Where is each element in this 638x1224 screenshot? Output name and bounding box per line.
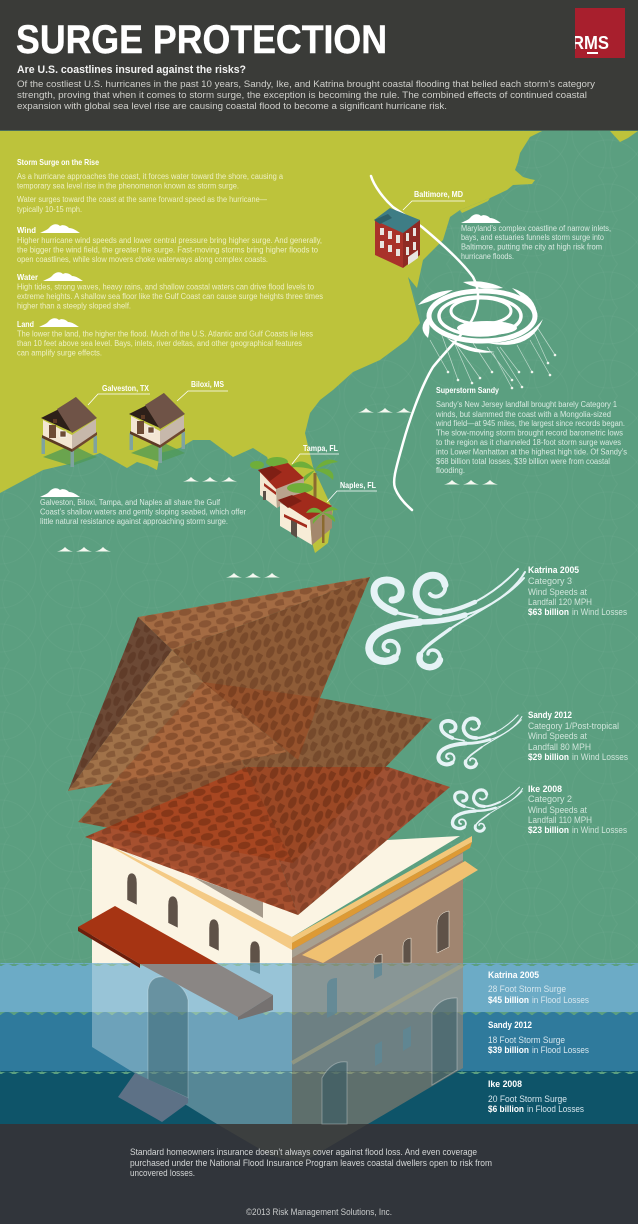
icon: wind Sandy: [438, 715, 522, 768]
icon: Florida palms and buildings: [250, 457, 338, 545]
text: Sandy wind: in Wind Losses: [572, 752, 628, 762]
text: gulf coast note: [40, 488, 246, 526]
text: Sandy wind: Wind Speeds at: [528, 731, 587, 741]
RMS logo: [572, 8, 625, 58]
footer note: purchased under the National Flood Insurance Program leaves coastal dwellers open to risk from: [130, 1158, 492, 1169]
text: Sandy flood: in Flood Losses: [532, 1045, 589, 1055]
panel: storm surge explainer: High tides, strong waves, heavy rains, and shallow coastal waters can drive flood levels to: [17, 282, 315, 292]
panel: storm surge explainer: the bigger the wind field, the greater the surge. Fast-moving storms bring higher floods to: [17, 246, 319, 254]
text: Katrina flood: in Flood Losses: [532, 995, 589, 1005]
text: Ike wind: $23 billion: [528, 825, 569, 835]
chart: water bands: [0, 963, 638, 1124]
text: Katrina flood: Katrina 2005: [488, 970, 539, 980]
panel: storm surge explainer: temporary sea level rise in the phenomenon known as storm surge.: [17, 182, 239, 190]
label: Naples: [327, 480, 377, 502]
illustration: house walls: [92, 835, 478, 963]
label: Biloxi: Biloxi, MS: [191, 379, 224, 389]
text: Ike flood: in Flood Losses: [527, 1104, 584, 1114]
text: Ike wind: Landfall 110 MPH: [528, 815, 592, 825]
icon: small waves: [57, 408, 498, 578]
footer note: [130, 1147, 492, 1179]
text: Sandy wind: $29 billion: [528, 752, 569, 762]
RMS logo: RMS: [572, 33, 609, 53]
text: Katrina flood: [488, 970, 589, 1005]
text: Superstorm Sandy: to the region as it channeled 18-foot storm surge waves: [436, 438, 621, 447]
label: Baltimore: Baltimore, MD: [414, 189, 463, 199]
label: Biloxi: [177, 379, 228, 401]
text: Katrina wind: Landfall 120 MPH: [528, 597, 592, 607]
door: right: [432, 998, 457, 1085]
panel: storm surge explainer: Water: [17, 272, 39, 282]
label: Galveston: [88, 383, 150, 405]
text: Superstorm Sandy: Superstorm Sandy: [436, 385, 499, 395]
intro paragraph: expansion with global sea level rise are causing coastal flood to become a significant hurricane risk.: [17, 101, 447, 112]
icon: house Biloxi: [129, 393, 185, 463]
text: Ike flood: [488, 1079, 584, 1114]
text: Ike flood: 20 Foot Storm Surge: [488, 1094, 567, 1104]
text: Superstorm Sandy: The slow-moving storm brought record barometric lows: [436, 428, 623, 438]
illustration: ghost house under water: [92, 963, 463, 1164]
panel: storm surge explainer: open coastlines, while slow movers choke waterways along complex coasts.: [17, 255, 268, 264]
icon: wind Katrina: [369, 569, 525, 667]
text: Ike wind: [528, 784, 627, 835]
illustration: roof layer 3: [85, 767, 450, 915]
icon: wind Ike: [452, 787, 523, 831]
panel: storm surge explainer: [17, 157, 323, 358]
text: Katrina wind: [528, 565, 627, 617]
text: gulf coast note: little natural resistance against approaching storm surge.: [40, 517, 228, 526]
panel: storm surge explainer: Water surges toward the coast at the same forward speed as the hurricane—: [17, 195, 267, 204]
panel: storm surge explainer: can amplify surge effects.: [17, 348, 102, 358]
text: Maryland note: Baltimore, putting the city at high risk from: [461, 242, 602, 252]
text: Ike wind: in Wind Losses: [572, 825, 627, 835]
text: Katrina wind: in Wind Losses: [572, 607, 627, 617]
illustration: awning: [78, 906, 273, 1020]
label: Tampa: [292, 443, 339, 464]
text: Katrina wind: Katrina 2005: [528, 565, 579, 575]
building Tampa: [258, 463, 304, 508]
text: Superstorm Sandy: Sandy’s New Jersey landfall brought barely Category 1: [436, 400, 618, 409]
text: Superstorm Sandy: $68 billion total losses, $39 billion were from coastal: [436, 457, 610, 466]
copyright: ©2013 Risk Management Solutions, Inc.: [246, 1207, 392, 1217]
text: Katrina wind: Wind Speeds at: [528, 587, 587, 597]
panel: storm surge explainer: than 10 feet above sea level. Bays, inlets, river deltas, and other geographical features: [17, 339, 302, 348]
door: left: [148, 977, 188, 1098]
text: Maryland note: Maryland’s complex coastline of narrow inlets,: [461, 224, 611, 233]
panel: storm surge explainer: typically 10-15 mph.: [17, 205, 82, 214]
text: Sandy flood: 18 Foot Storm Surge: [488, 1035, 565, 1045]
footer note: Standard homeowners insurance doesn’t always cover against flood loss. And even coverage: [130, 1147, 477, 1158]
text: gulf coast note: Galveston, Biloxi, Tampa, and Naples all share the Gulf: [40, 498, 221, 507]
label: Galveston: Galveston, TX: [102, 383, 149, 393]
panel: storm surge explainer: Land: [17, 319, 34, 329]
intro paragraph: [17, 79, 595, 112]
panel: storm surge explainer: The lower the land, the higher the flood. Much of the U.S. Atlantic and Gulf Coasts lie less: [17, 330, 313, 338]
footer band: [0, 1124, 638, 1224]
map: land mass: [0, 131, 638, 553]
text: Ike flood: $6 billion: [488, 1104, 524, 1114]
icon: Baltimore building: [374, 208, 420, 268]
text: gulf coast note: Coast’s shallow waters and gently sloping seabed, which offer: [40, 508, 246, 516]
text: Ike wind: Category 2: [528, 794, 572, 804]
label: Naples: Naples, FL: [340, 480, 376, 490]
text: Katrina wind: Category 3: [528, 576, 572, 586]
panel: storm surge explainer: Storm Surge on the Rise: [17, 157, 99, 167]
text: Sandy wind: Sandy 2012: [528, 710, 572, 720]
panel: storm surge explainer: Wind: [17, 225, 36, 235]
text: Ike wind: Ike 2008: [528, 784, 562, 794]
panel: storm surge explainer: extreme heights. A shallow sea floor like the Gulf Coast can cause surge heights three times: [17, 292, 323, 301]
storm track line: [371, 176, 478, 510]
text: Sandy wind: Category 1/Post-tropical: [528, 721, 619, 731]
footer note: uncovered losses.: [130, 1168, 195, 1179]
text: Katrina flood: $45 billion: [488, 995, 529, 1005]
text: Katrina wind: $63 billion: [528, 607, 569, 617]
illustration: roof layer 1: [68, 577, 370, 791]
panel: storm surge explainer: higher than a steeply sloped shelf.: [17, 302, 131, 310]
text: Superstorm Sandy: flooding.: [436, 466, 465, 475]
text: Sandy flood: Sandy 2012: [488, 1020, 532, 1030]
text: Maryland note: bays, and estuaries funnels storm surge into: [461, 233, 604, 242]
text: Superstorm Sandy: [435, 385, 627, 475]
text: Katrina flood: 28 Foot Storm Surge: [488, 984, 566, 994]
text: Maryland note: hurricane floods.: [461, 252, 514, 261]
icon: house Galveston: [41, 397, 97, 467]
icon: hurricane: [418, 281, 556, 389]
front steps: [118, 1073, 188, 1122]
text: Sandy flood: $39 billion: [488, 1045, 529, 1055]
sea scallop texture: [0, 130, 638, 965]
label: Baltimore: [403, 189, 465, 210]
text: Sandy flood: [488, 1020, 589, 1055]
text: Maryland note: [461, 214, 611, 261]
text: Superstorm Sandy: winds, but slammed the coast with a Mongolia-sized: [435, 410, 611, 419]
header band: [0, 0, 638, 130]
text: Ike flood: Ike 2008: [488, 1079, 522, 1089]
intro paragraph: strength, proving that when it comes to storm surge, the exception is becoming the rule. The combined effects of continued coastal: [17, 90, 587, 101]
text: Sandy wind: Landfall 80 MPH: [528, 742, 591, 752]
windows: [127, 873, 449, 963]
text: Superstorm Sandy: wind field—at 945 miles, the largest since records began.: [435, 419, 625, 428]
label: Tampa: Tampa, FL: [303, 443, 338, 453]
text: Ike wind: Wind Speeds at: [528, 805, 587, 815]
door: center: [322, 1062, 347, 1124]
text: Superstorm Sandy: into Lower Manhattan at the highest high tide. Of Sandy’s: [436, 448, 627, 456]
building Naples: [278, 492, 332, 545]
illustration: roof layer 2: [78, 682, 432, 863]
subtitle: Are U.S. coastlines insured against the risks?: [17, 64, 246, 76]
panel: storm surge explainer: Higher hurricane wind speeds and lower central pressure bring higher surge. And generally,: [17, 236, 322, 245]
intro paragraph: Of the costliest U.S. hurricanes in the past 10 years, Sandy, Ike, and Katrina brought coastal flooding that belied each storm’s category: [17, 79, 595, 90]
panel: storm surge explainer: As a hurricane approaches the coast, it forces water toward the shore, causing a: [17, 172, 284, 181]
text: Sandy wind: [528, 710, 628, 762]
title: SURGE PROTECTION: [16, 18, 387, 62]
